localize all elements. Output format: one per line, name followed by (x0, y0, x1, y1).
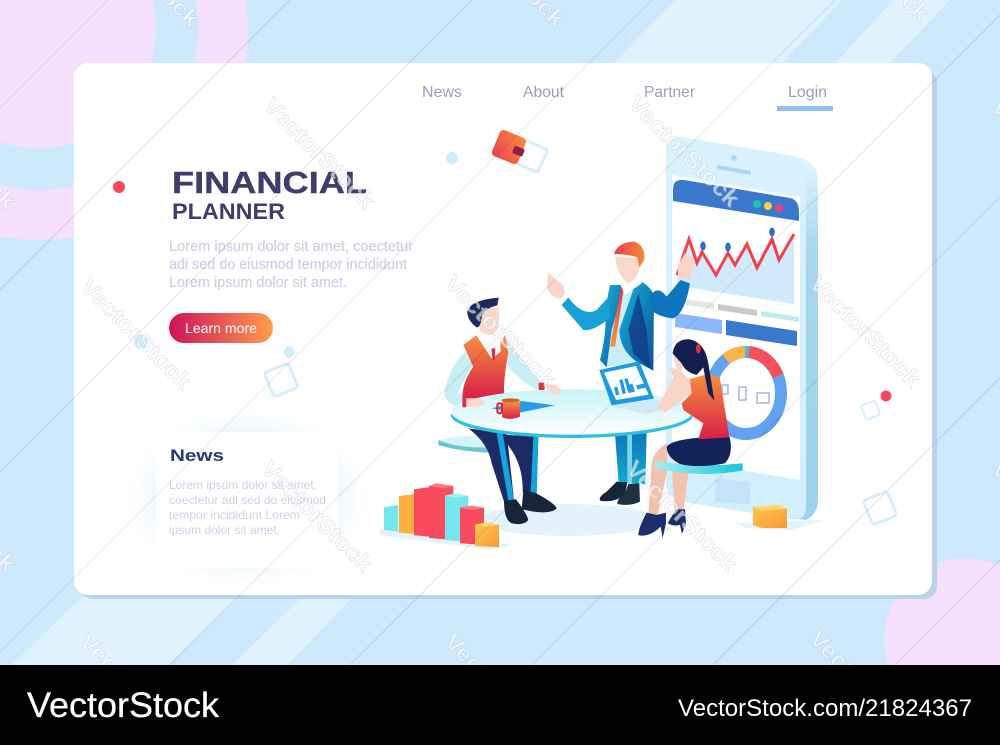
navigation: Partner (644, 84, 696, 101)
intro text (169, 239, 413, 291)
seated man torso (444, 298, 541, 407)
woman (638, 339, 743, 538)
title: FINANCIAL (172, 165, 367, 200)
footer band: VectorStock (27, 686, 220, 725)
news card: Lorem ipsum dolor sit amet, (169, 478, 317, 492)
news card: ipsum dolor sit amet. (169, 523, 280, 537)
orange box by phone (735, 505, 826, 530)
intro text: adi sed do eiusmod tempor incididunt (169, 257, 407, 273)
watermarks: VectorStock (623, 90, 745, 212)
intro text: Lorem ipsum dolor sit amet, coectetur (169, 239, 413, 255)
watermarks: VectorStock (256, 455, 378, 577)
laptop (599, 361, 682, 414)
ground shadow (478, 504, 658, 536)
line chart (677, 228, 794, 304)
learn more button: Learn more (185, 320, 257, 336)
standing man (547, 242, 695, 505)
news card: tempor incididunt Lorem (169, 508, 300, 522)
raised arm (649, 280, 690, 318)
watermarks: VectorStock (258, 92, 380, 214)
seated man hands (462, 383, 562, 407)
watermarks: VectorStock (439, 270, 561, 392)
navigation: News (422, 84, 462, 101)
cup and paper (492, 398, 555, 419)
navigation: About (523, 84, 565, 101)
watermarks: VectorStock (75, 273, 197, 395)
watermarks: VectorStock (804, 625, 926, 745)
phone (666, 137, 818, 520)
bars (384, 483, 499, 547)
title: PLANNER (172, 199, 285, 224)
intro text: Lorem ipsum dolor sit amet. (169, 275, 347, 291)
news card: coectetur adi sed do eiusmod (169, 493, 326, 507)
navigation: Login (788, 84, 827, 101)
table (451, 389, 693, 438)
watermarks: VectorStock (621, 455, 743, 577)
seated man legs (468, 428, 557, 524)
watermarks: VectorStock (439, 628, 561, 745)
screen header (673, 180, 799, 221)
icon: floating cube (491, 129, 548, 173)
left stool (438, 436, 523, 453)
watermarks: VectorStock (74, 628, 196, 745)
watermarks: VectorStock (804, 270, 926, 392)
main card (74, 63, 937, 599)
learn more button (169, 313, 273, 343)
navigation (422, 84, 833, 111)
screen tile (715, 479, 750, 504)
news card: News (170, 446, 224, 465)
pointing arm (562, 298, 611, 330)
bar chart (380, 483, 513, 550)
footer band: VectorStock.com/21824367 (678, 695, 972, 722)
footer band (0, 665, 1000, 745)
title (172, 165, 367, 224)
news card (117, 402, 377, 594)
donut chart (711, 352, 781, 434)
screen bars (675, 299, 799, 346)
decorative dots and squares (113, 152, 897, 525)
people and table (438, 242, 743, 538)
